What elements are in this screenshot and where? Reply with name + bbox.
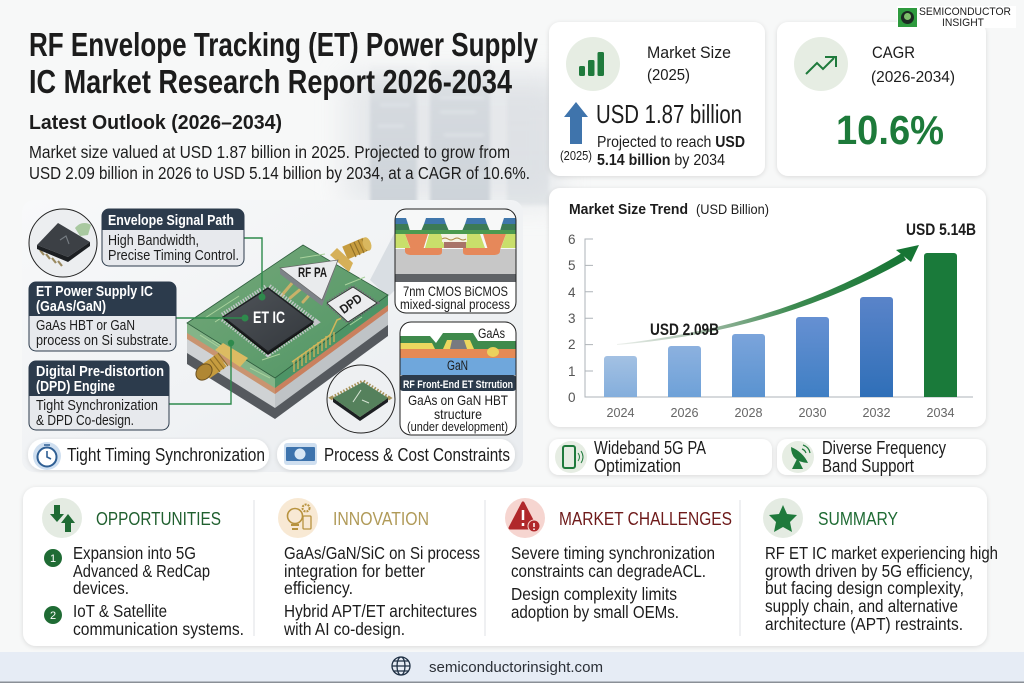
connector: bottom left xyxy=(193,343,248,383)
body text: supply chain, and alternative xyxy=(765,596,958,616)
connector: top right xyxy=(330,236,373,272)
x axis labels xyxy=(606,405,954,420)
panel: CAGR card: (2026-2034) xyxy=(871,69,955,86)
callout: digital pre-distortion engine: Tight Synchronization xyxy=(36,397,158,414)
projection text: 5.14 billion by 2034 xyxy=(597,152,725,169)
pill: tight timing synchronization xyxy=(28,439,269,470)
heading: INNOVATION xyxy=(333,509,429,529)
body text: with AI co-design. xyxy=(283,619,405,639)
value: 10.6% xyxy=(836,107,944,153)
icon: chip magnifier bottom xyxy=(327,365,395,433)
column: opportunities xyxy=(42,498,244,639)
x axis labels: 2028 xyxy=(734,405,762,420)
axes: 6 xyxy=(568,232,576,247)
pill: diverse frequency band support xyxy=(777,438,986,476)
inset: 7nm CMOS process xyxy=(395,209,516,313)
callout: digital pre-distortion engine: (DPD) Engine xyxy=(36,378,115,395)
inset: GaAs on GaN HBT structure: GaN xyxy=(447,358,468,373)
pill: tight timing synchronization: Tight Timing Synchronization xyxy=(67,445,265,465)
body text xyxy=(283,543,480,639)
column: summary xyxy=(763,498,998,634)
column: innovation xyxy=(278,498,480,639)
board xyxy=(187,245,388,419)
projection text: Projected to reach USD xyxy=(597,134,745,151)
pill: wideband 5G PA optimization: Optimization xyxy=(594,456,681,476)
year note: (2025) xyxy=(560,149,592,163)
axes: 3 xyxy=(568,311,576,326)
metal pads xyxy=(395,224,516,231)
inset: GaAs on GaN HBT structure xyxy=(400,322,516,435)
callout: ET power supply IC: ET Power Supply IC xyxy=(36,283,153,300)
pill: process and cost constraints xyxy=(277,439,515,470)
intro paragraph: USD 2.09 billion in 2026 to USD 5.14 billion by 2034, at a CAGR of 10.6%. xyxy=(29,163,530,183)
body text xyxy=(511,543,715,622)
body text: adoption by small OEMs. xyxy=(511,602,679,622)
axes: 5 xyxy=(568,258,576,273)
DPD chip xyxy=(327,287,377,322)
logo xyxy=(897,6,1016,29)
title: RF Envelope Tracking (ET) Power Supply xyxy=(29,26,539,63)
x axis labels: 2030 xyxy=(798,405,826,420)
DPD chip: DPD xyxy=(337,291,365,317)
chip: ET IC xyxy=(223,288,313,355)
chart title: Market Size Trend xyxy=(569,201,688,218)
footer xyxy=(0,652,1024,683)
icon: trend line xyxy=(794,37,848,91)
x axis labels: 2024 xyxy=(606,405,634,420)
inset: GaAs on GaN HBT structure: (under development) xyxy=(407,419,508,434)
title: IC Market Research Report 2026-2034 xyxy=(29,63,513,100)
icon: up arrow xyxy=(564,102,588,144)
callout: digital pre-distortion engine: & DPD Co-design. xyxy=(36,412,134,429)
callout: envelope signal path: Precise Timing Control. xyxy=(108,247,239,264)
pill: wideband 5G PA optimization xyxy=(549,438,772,476)
heading: CAGR xyxy=(872,44,915,62)
pill: wideband 5G PA optimization: Wideband 5G PA xyxy=(594,438,706,458)
chart title: (USD Billion) xyxy=(696,202,769,217)
annotation: 2026 value: USD 2.09B xyxy=(650,321,719,339)
body text: constraints can degradeACL. xyxy=(511,561,706,581)
pill: diverse frequency band support: Band Support xyxy=(822,456,914,476)
axes: 0 xyxy=(568,390,576,405)
body text: Design complexity limits xyxy=(511,584,677,604)
pill: process and cost constraints: Process & Cost Constraints xyxy=(324,445,510,465)
callout: digital pre-distortion engine xyxy=(29,340,234,430)
axes: 4 xyxy=(568,285,576,300)
inset: 7nm CMOS process: mixed-signal process xyxy=(400,296,510,312)
traces to RF PA xyxy=(282,282,312,302)
bars xyxy=(604,253,957,397)
inset: GaAs on GaN HBT structure: GaAs xyxy=(478,326,505,341)
chart title xyxy=(569,201,769,218)
item 2: 2 xyxy=(50,610,56,622)
axes: 1 xyxy=(568,364,576,379)
pill: diverse frequency band support: Diverse Frequency xyxy=(822,438,946,458)
body text: growth driven by 5G efficiency, xyxy=(765,561,973,581)
logo: INSIGHT xyxy=(942,17,984,29)
body text: Severe timing synchronization xyxy=(511,543,715,563)
icon: up and down arrows xyxy=(42,498,82,538)
callout: envelope signal path xyxy=(102,209,266,300)
x axis labels: 2032 xyxy=(862,405,890,420)
annotation: 2034 value: USD 5.14B xyxy=(906,221,976,239)
heading: MARKET CHALLENGES xyxy=(559,509,732,529)
intro paragraph: Market size valued at USD 1.87 billion in 2025. Projected to grow from xyxy=(29,142,510,162)
icon: chip magnifier top left xyxy=(29,209,97,277)
callout: ET power supply IC: process on Si substrate. xyxy=(36,332,172,349)
panel: market size card: (2025) xyxy=(647,67,690,84)
title xyxy=(29,26,539,100)
RF PA triangle xyxy=(280,260,338,306)
inset: GaAs on GaN HBT structure: GaAs on GaN HBT xyxy=(408,392,508,408)
item 1: Expansion into 5G xyxy=(73,543,196,563)
heading: Market Size xyxy=(647,44,731,62)
icon: warning triangle xyxy=(505,498,545,538)
item 1: Advanced & RedCap xyxy=(73,561,210,581)
axes xyxy=(568,232,973,405)
column: market challenges xyxy=(505,498,732,622)
callout: ET power supply IC: GaAs HBT or GaN xyxy=(36,317,135,334)
panel: CAGR card xyxy=(777,22,986,176)
callout: ET power supply IC xyxy=(29,282,248,351)
icon: light bulb and gear xyxy=(278,498,318,538)
item 2: communication systems. xyxy=(73,619,244,639)
callout: digital pre-distortion engine: Digital Pre-distortion xyxy=(36,363,164,380)
value: USD 1.87 billion xyxy=(596,99,742,129)
panel: bottom summary xyxy=(23,487,998,646)
inset: GaAs on GaN HBT structure: RF Front-End ET Strrution xyxy=(403,379,513,391)
icon: star xyxy=(763,498,803,538)
inset: GaAs on GaN HBT structure: structure xyxy=(434,406,482,422)
item 2: IoT & Satellite xyxy=(73,601,167,621)
axes: 2 xyxy=(568,337,576,352)
website: semiconductorinsight.com xyxy=(429,659,603,676)
growth arrow xyxy=(617,245,919,345)
callout: envelope signal path: Envelope Signal Path xyxy=(108,212,234,229)
inset: 7nm CMOS process: 7nm CMOS BiCMOS xyxy=(403,283,508,299)
heading: SUMMARY xyxy=(818,509,898,529)
subtitle: latest outlook: Latest Outlook (2026–2034) xyxy=(29,112,282,134)
panel: market size trend chart xyxy=(549,188,986,427)
body text: architecture (APT) restraints. xyxy=(765,614,963,634)
body text: efficiency. xyxy=(284,578,353,598)
callout: envelope signal path: High Bandwidth, xyxy=(108,232,199,249)
body text: Hybrid APT/ET architectures xyxy=(284,601,477,621)
doped regions xyxy=(405,234,428,250)
chip: ET IC: ET IC xyxy=(253,308,285,327)
body text: integration for better xyxy=(284,561,425,581)
item 1: 1 xyxy=(50,553,56,565)
body text xyxy=(765,543,998,634)
x axis labels: 2026 xyxy=(670,405,698,420)
body text: GaAs/GaN/SiC on Si process xyxy=(284,543,480,563)
body text: but facing design complexity, xyxy=(765,578,964,598)
callout: ET power supply IC: (GaAs/GaN) xyxy=(36,298,106,315)
item 1 xyxy=(44,543,210,598)
item 2 xyxy=(44,601,244,639)
projection text xyxy=(597,134,745,169)
icon: bar chart xyxy=(566,37,620,91)
inset magnifier cones xyxy=(370,232,395,297)
logo: SEMICONDUCTOR xyxy=(919,6,1011,18)
intro paragraph xyxy=(29,142,530,183)
x axis labels: 2034 xyxy=(926,405,954,420)
icon: globe xyxy=(392,657,410,675)
heading: OPPORTUNITIES xyxy=(96,509,221,529)
panel: diagram xyxy=(22,200,523,472)
gold contact pads xyxy=(294,332,334,372)
RF PA triangle: RF PA xyxy=(298,264,327,280)
item 1: devices. xyxy=(73,578,129,598)
panel: market size card xyxy=(549,22,765,176)
